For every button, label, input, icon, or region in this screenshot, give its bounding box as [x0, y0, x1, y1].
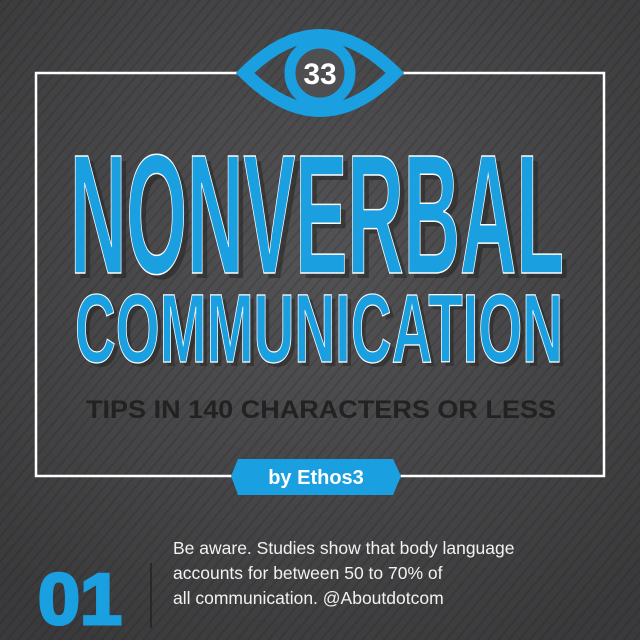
- divider: [150, 563, 152, 628]
- frame: [36, 73, 604, 476]
- tip text: Be aware. Studies show that body language: [173, 538, 514, 558]
- tip text: [173, 538, 514, 608]
- badge: by Ethos3: [231, 459, 401, 495]
- badge: by Ethos3: by Ethos3: [268, 467, 364, 489]
- tip text: accounts for between 50 to 70% of: [173, 563, 443, 583]
- tip number 01: 01: [38, 560, 122, 640]
- icon: eye with 33: [245, 36, 395, 110]
- icon: eye with 33: 33: [303, 58, 337, 91]
- tip text: all communication. @Aboutdotcom: [173, 588, 444, 608]
- subtitle: TIPS IN 140 CHARACTERS OR LESS: [86, 396, 556, 424]
